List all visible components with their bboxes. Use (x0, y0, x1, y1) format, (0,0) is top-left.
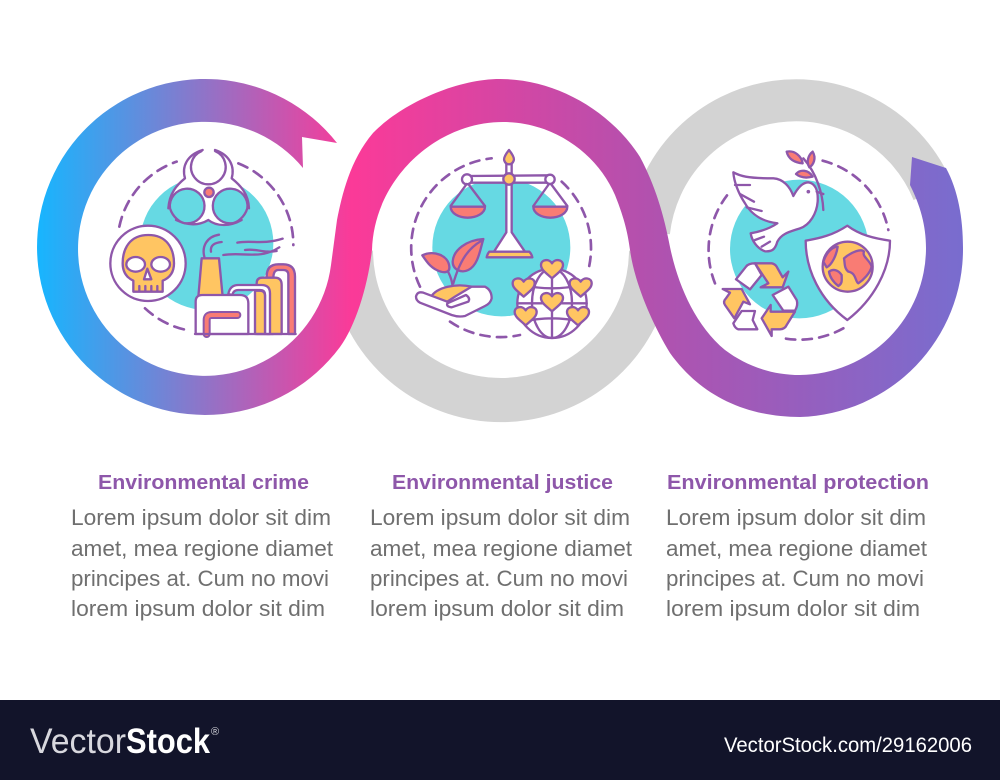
heading: Environmental justice (392, 472, 613, 494)
logo: Vector (30, 722, 126, 761)
teal circle (432, 178, 570, 316)
globe with hearts (513, 260, 592, 338)
plant in hand (416, 239, 492, 316)
teal circle (140, 177, 273, 310)
body text: amet, mea regione diamet (666, 536, 927, 561)
body text: principes at. Cum no movi (370, 566, 628, 591)
dashed ring (119, 162, 293, 330)
footer bar (0, 700, 1000, 780)
grey ring: right (649, 100, 933, 232)
gradient ribbon (37, 79, 963, 417)
dove with branch (733, 151, 823, 251)
logo: Stock (126, 722, 210, 761)
dashed ring (411, 158, 591, 337)
body text: lorem ipsum dolor sit dim (71, 596, 325, 621)
recycle arrows (723, 263, 797, 336)
logo: ® (211, 726, 219, 738)
dashed ring (709, 161, 888, 340)
icon: environmental protection (709, 151, 890, 340)
teal circle (730, 180, 869, 318)
shield with earth (806, 226, 890, 320)
icon: environmental justice (411, 150, 592, 338)
body text (666, 505, 927, 621)
body text: principes at. Cum no movi (71, 566, 329, 591)
heading: Environmental protection (667, 472, 929, 494)
smoke (204, 235, 283, 257)
biohazard symbol (168, 150, 249, 225)
body text: amet, mea regione diamet (71, 536, 333, 561)
body text: principes at. Cum no movi (666, 566, 924, 591)
image id: VectorStock.com/29162006 (724, 734, 972, 757)
body text: Lorem ipsum dolor sit dim (666, 505, 926, 530)
body text: amet, mea regione diamet (370, 536, 632, 561)
icon: environmental crime (110, 150, 296, 334)
body text (370, 505, 632, 621)
factory (195, 258, 296, 334)
logo (30, 722, 219, 761)
balance scale (451, 150, 567, 257)
body text (71, 505, 333, 621)
heading: Environmental crime (98, 472, 309, 494)
column: environmental justice (370, 472, 632, 621)
body text: Lorem ipsum dolor sit dim (370, 505, 630, 530)
skull badge (110, 226, 186, 301)
column: environmental protection (666, 472, 929, 621)
body text: lorem ipsum dolor sit dim (666, 596, 920, 621)
grey ring: middle (337, 250, 665, 422)
body text: lorem ipsum dolor sit dim (370, 596, 624, 621)
body text: Lorem ipsum dolor sit dim (71, 505, 331, 530)
column: environmental crime (71, 472, 333, 621)
